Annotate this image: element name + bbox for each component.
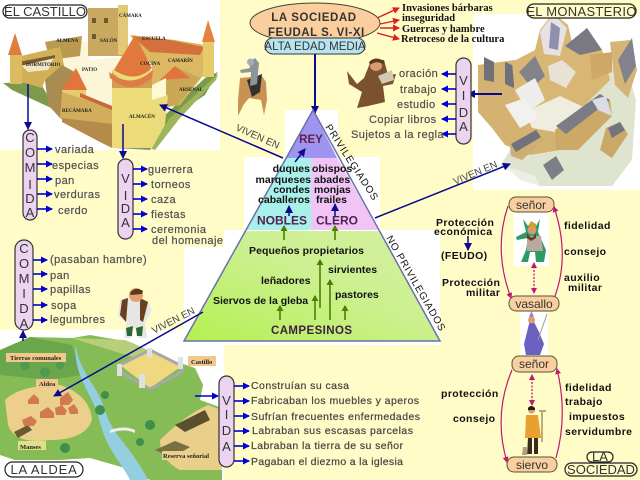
title ellipse: FEUDAL S. VI-XI xyxy=(268,27,365,39)
castle food list: I xyxy=(28,177,32,192)
castle life list: fiestas xyxy=(151,209,186,221)
illustration: monastery xyxy=(478,13,637,186)
castle room labels: DORMITORIO xyxy=(26,63,60,68)
illustration: village map xyxy=(0,335,222,480)
causes list with red arrows: Retroceso de la cultura xyxy=(401,34,505,45)
village life list: Construían su casa xyxy=(251,380,349,392)
map tags: Tierras comunales xyxy=(10,355,62,362)
castle room labels: CÁMARA xyxy=(119,13,142,19)
tier: rey: REY xyxy=(299,134,323,146)
arrow: clergy live in monastery: VIVEN EN xyxy=(452,159,499,188)
castle life list: del homenaje xyxy=(152,235,223,247)
feudal relation: señor-vasallo: fidelidad xyxy=(564,220,611,232)
tier: clero: CLERO xyxy=(316,214,358,228)
causes list with red arrows xyxy=(377,3,505,45)
tier: nobles xyxy=(256,163,311,228)
tier: nobles: marqueses xyxy=(256,174,311,186)
feudal relation: señor-siervo: impuestos xyxy=(569,411,625,423)
feudal relation: señor-vasallo xyxy=(434,197,611,311)
castle life list: caza xyxy=(151,194,176,206)
village food list xyxy=(15,240,147,331)
castle food list: verduras xyxy=(54,189,100,201)
castle food list: variada xyxy=(55,144,95,156)
castle room labels: PATIO xyxy=(82,68,97,73)
map tags: Castillo xyxy=(191,359,212,366)
village life list: Labraban sus escasas parcelas xyxy=(252,425,413,437)
castle life list: I xyxy=(124,188,127,203)
map tags: Aldea xyxy=(39,381,56,388)
castle food list: especias xyxy=(52,160,99,172)
arrow: peasants live in village: VIVEN EN xyxy=(150,306,197,337)
village food list: O xyxy=(19,256,29,271)
village food list: D xyxy=(19,301,29,316)
village life list: Labraban la tierra de su señor xyxy=(251,440,404,452)
arrow: peasants live in village xyxy=(54,306,203,396)
icon: knight on horse xyxy=(238,58,267,116)
subtitle pill: ALTA EDAD MEDIA xyxy=(264,41,366,53)
tier: clero: abades xyxy=(314,174,350,186)
feudal relation: señor-vasallo: militar xyxy=(466,287,500,299)
feudal relation: señor-siervo xyxy=(441,356,632,472)
feudal relation: señor-vasallo: consejo xyxy=(564,246,606,258)
castle room labels: ESCUELA xyxy=(142,37,166,42)
label: La sociedad xyxy=(565,449,637,477)
castle life list: A xyxy=(121,215,130,230)
monastery life list: trabajo xyxy=(400,84,437,96)
castle food list: A xyxy=(26,205,35,220)
title ellipse xyxy=(250,3,380,43)
tier: nobles: NOBLES xyxy=(257,214,307,228)
monastery life list: V xyxy=(459,73,468,88)
castle food list: cerdo xyxy=(58,205,88,217)
castle room labels: ARSENAL xyxy=(179,88,204,93)
village life list: Sufrían frecuentes enfermedades xyxy=(251,411,420,423)
feudal relation: señor-siervo: siervo xyxy=(516,458,548,472)
village food list: C xyxy=(19,241,29,256)
tier: clero: obispos xyxy=(312,163,352,175)
tier: nobles: caballeros xyxy=(258,194,310,206)
castle life list: V xyxy=(121,171,130,186)
feudal relation: señor-siervo: fidelidad xyxy=(565,382,612,394)
village food list: M xyxy=(19,271,29,286)
monastery life list: estudio xyxy=(397,99,436,111)
tier: clero: frailes xyxy=(316,194,347,206)
feudal relation: señor-vasallo: económica xyxy=(434,226,492,238)
village food list: sopa xyxy=(51,300,77,312)
castle life list: guerrera xyxy=(148,164,194,176)
village life list: Fabricaban los muebles y aperos xyxy=(251,395,419,407)
tier: campesinos: Pequeños propietarios xyxy=(249,245,364,257)
village life list: I xyxy=(225,407,228,422)
castle life list: ceremonia xyxy=(151,224,207,236)
icon: monk xyxy=(347,58,396,108)
causes list with red arrows: Invasiones bárbaras xyxy=(402,3,493,14)
tier: clero: monjas xyxy=(314,184,351,196)
village life list xyxy=(195,376,420,468)
causes list with red arrows: inseguridad xyxy=(402,13,455,24)
pyramid xyxy=(184,110,440,341)
castle room labels: ALMENA xyxy=(56,39,79,44)
arrow: clergy live in monastery xyxy=(375,159,510,218)
castle room labels xyxy=(26,13,204,120)
icon: vassal bishop figure xyxy=(520,311,548,356)
feudal relation: señor-siervo: trabajo xyxy=(565,396,603,408)
arrow: nobles to rey xyxy=(295,149,305,162)
castle room labels: SALÓN xyxy=(100,38,118,44)
label: El monasterio: EL MONASTERIO xyxy=(526,4,637,19)
feudal relation: señor-siervo: consejo xyxy=(453,413,495,425)
icon: peasant figure xyxy=(118,288,152,338)
village food list: A xyxy=(20,316,29,331)
monastery life list: I xyxy=(462,88,465,103)
feudal relation: señor-siervo: servidumbre xyxy=(565,426,632,438)
tier: nobles: duques xyxy=(273,163,310,175)
label: La sociedad: LA xyxy=(592,449,608,464)
monastery life list: oración xyxy=(399,68,438,80)
map tags: Reserva señorial xyxy=(163,453,209,460)
village food list: I xyxy=(22,286,26,301)
castle room labels: COCINA xyxy=(140,62,161,67)
tier: campesinos: Siervos de la gleba xyxy=(213,295,308,307)
feudal relation: señor-vasallo: vasallo xyxy=(515,297,553,311)
icon: serf figure xyxy=(522,406,546,455)
village life list: D xyxy=(222,423,231,438)
tier: campesinos: pastores xyxy=(335,289,379,301)
arrow: title to pyramid xyxy=(314,54,316,113)
village food list: (pasaban hambre) xyxy=(50,254,147,266)
monastery life list: Sujetos a la regla xyxy=(351,129,445,141)
village life list: A xyxy=(222,439,231,454)
feudal relation: señor-vasallo: auxilio xyxy=(564,272,600,284)
title ellipse: LA SOCIEDAD xyxy=(271,12,357,24)
monastery life list xyxy=(351,58,502,144)
castle food list: O xyxy=(25,145,35,160)
castle life list xyxy=(118,124,223,247)
arrow: nobles live in castle xyxy=(160,105,283,158)
castle food list: M xyxy=(25,160,35,175)
feudal relation: señor-vasallo: Protección xyxy=(436,217,494,229)
village food list: pan xyxy=(50,270,70,282)
arrow: nobles live in castle: VIVEN EN xyxy=(234,123,281,152)
monastery life list: A xyxy=(459,119,468,134)
feudal relation: señor-vasallo: señor xyxy=(516,198,546,212)
causes list with red arrows: Guerras y hambre xyxy=(402,24,485,35)
castle room labels: RECÁMARA xyxy=(62,108,92,114)
tier: campesinos: CAMPESINOS xyxy=(271,325,352,337)
map tags: Manses xyxy=(20,444,41,451)
feudal relation: señor-siervo: protección xyxy=(441,388,499,400)
village food list: papillas xyxy=(50,284,91,296)
feudal relation: señor-vasallo: Protección xyxy=(442,277,500,289)
illustration: castle xyxy=(3,5,218,150)
castle room labels: ALMACÉN xyxy=(129,114,155,120)
castle food list: pan xyxy=(55,175,75,187)
tier: nobles: condes xyxy=(273,184,310,196)
label: privilegiados: PRIVILEGIADOS xyxy=(322,123,380,203)
label: El castillo: EL CASTILLO xyxy=(4,4,86,19)
village life list: Pagaban el diezmo a la iglesia xyxy=(251,456,403,468)
castle room labels: CAMARÍN xyxy=(168,58,193,64)
label: La sociedad: SOCIEDAD xyxy=(567,462,635,477)
map tags xyxy=(6,353,216,460)
castle life list: D xyxy=(121,201,130,216)
village food list: legumbres xyxy=(50,314,105,326)
castle food list: C xyxy=(25,130,35,145)
icon: lord figure xyxy=(516,219,546,262)
arrow: village food from commons xyxy=(22,331,24,341)
tier: campesinos xyxy=(213,226,379,337)
tier: campesinos: sirvientes xyxy=(328,264,377,276)
label: no privilegiados: NO PRIVILEGIADOS xyxy=(383,234,447,333)
tier: clero xyxy=(312,163,358,228)
village life list: V xyxy=(222,393,231,408)
castle life list: torneos xyxy=(151,179,191,191)
castle food list xyxy=(23,84,100,220)
castle food list: D xyxy=(25,191,35,206)
label: La aldea: LA ALDEA xyxy=(10,462,78,477)
feudal relation: señor-vasallo: (FEUDO) xyxy=(441,250,488,262)
monastery life list: D xyxy=(459,105,468,120)
tier: campesinos: leñadores xyxy=(261,275,311,287)
monastery life list: Copiar libros xyxy=(369,114,437,126)
feudal relation: señor-vasallo: militar xyxy=(568,282,602,294)
feudal relation: señor-siervo: señor xyxy=(519,357,549,371)
